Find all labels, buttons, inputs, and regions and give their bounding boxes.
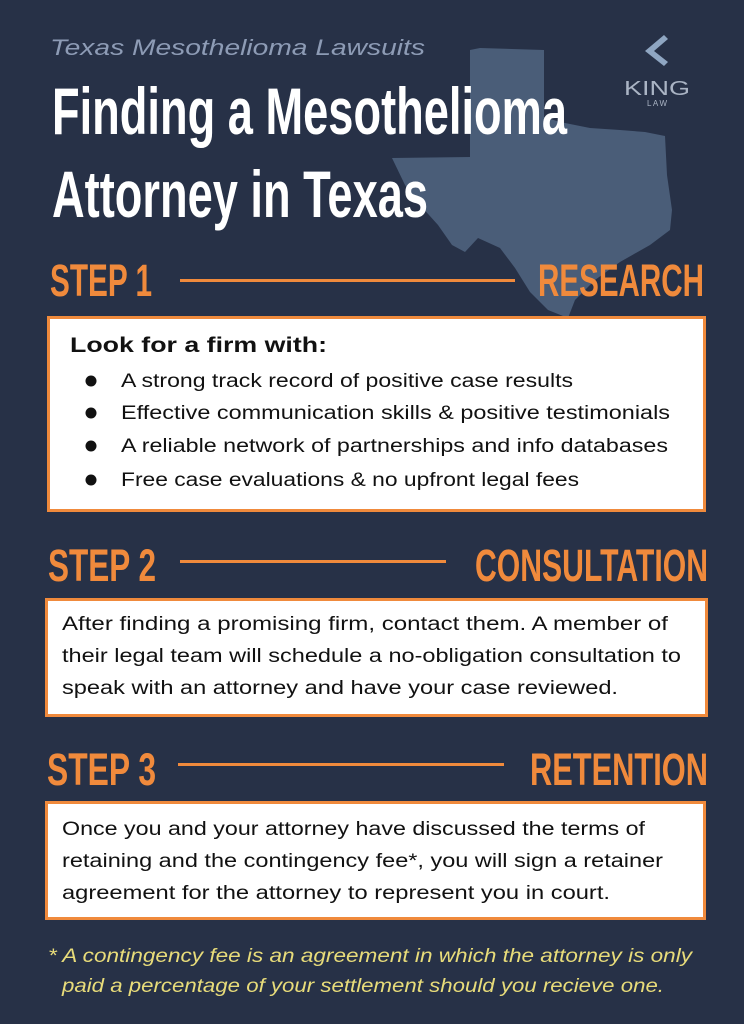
subtitle: Texas Mesothelioma Lawsuits [50,35,425,60]
texas map background [392,48,672,318]
title [52,74,568,231]
panel: step 3 retention [46,802,704,918]
logo: King Law: LAW [647,99,667,108]
step 2 header [48,540,708,591]
panel: step 1 research: Free case evaluations & no upfront legal fees [121,470,579,491]
panel: step 1 research [48,318,704,510]
step 3 header: STEP 3 [47,744,156,795]
panel: step 3 retention: Once you and your attorney have discussed the terms of [62,819,646,840]
title: Attorney in Texas [52,157,428,231]
panel: step 2 consultation [46,600,706,716]
footnote [48,946,694,997]
panel: step 1 research: Effective communication skills & positive testimonials [121,403,670,424]
footnote: * A contingency fee is an agreement in which the attorney is only [48,946,694,967]
panel: step 1 research: A strong track record of positive case results [121,371,573,392]
panel: step 1 research: Look for a firm with: [70,334,327,357]
logo: King Law [624,35,690,108]
panel: step 3 retention: agreement for the attorney to represent you in court. [62,883,610,904]
footnote: paid a percentage of your settlement should you recieve one. [61,976,664,997]
logo: King Law: KING [624,78,690,100]
step 2 header: STEP 2 [48,540,156,591]
panel: step 3 retention: retaining and the contingency fee*, you will sign a retainer [62,851,664,872]
panel: step 2 consultation: their legal team will schedule a no-obligation consultation to [62,646,681,667]
step 1 header: STEP 1 [50,255,152,306]
step 3 header [47,744,708,795]
panel: step 1 research: A reliable network of partnerships and info databases [121,436,668,457]
panel: step 2 consultation: After finding a promising firm, contact them. A member of [62,614,669,635]
panel: step 2 consultation: speak with an attorney and have your case reviewed. [62,678,618,699]
step 1 header [50,255,704,306]
